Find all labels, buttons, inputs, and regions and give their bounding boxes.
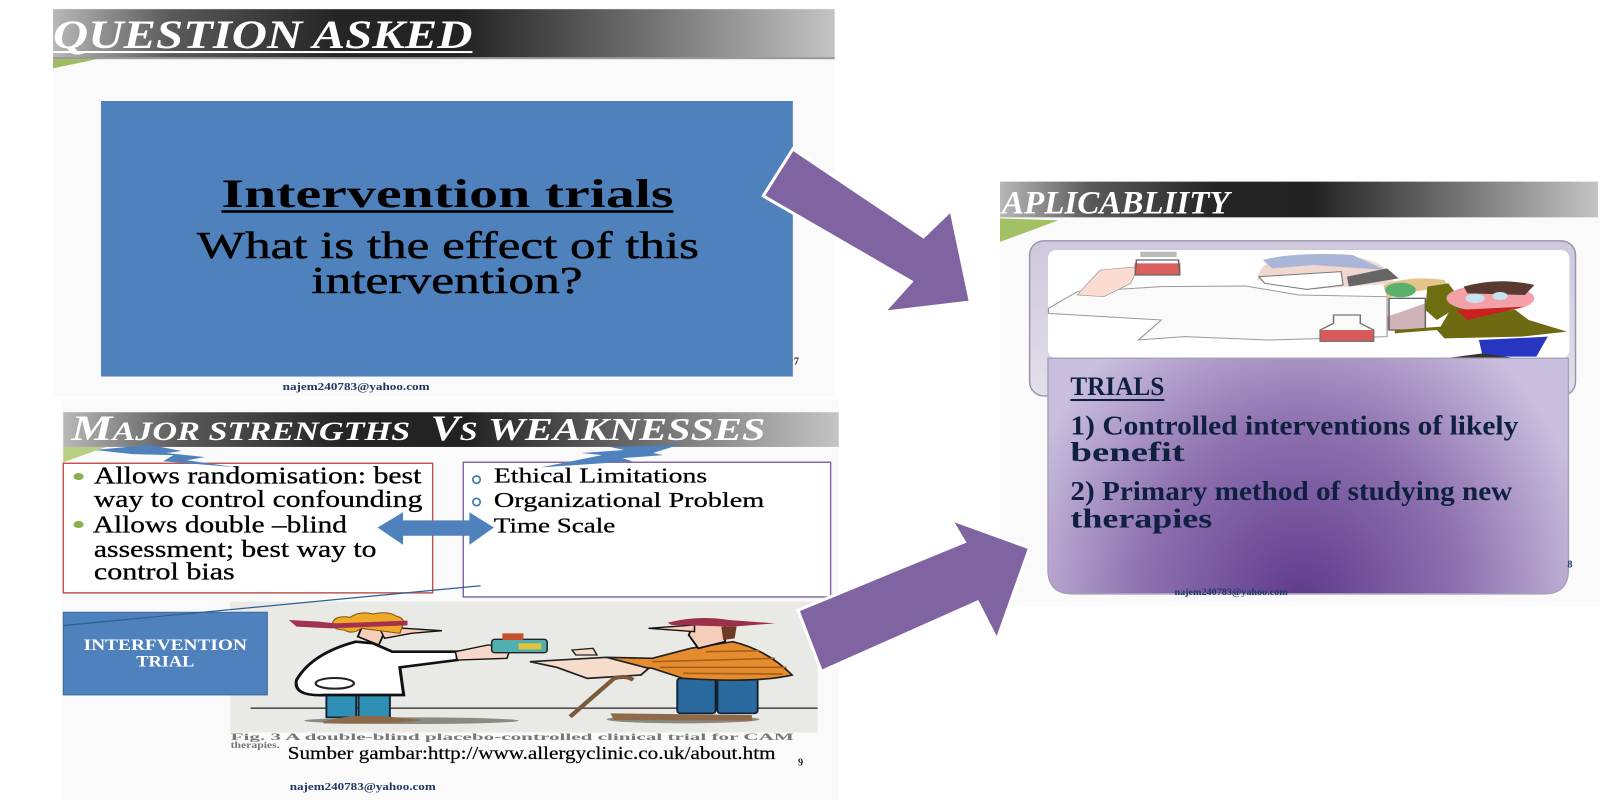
strengths box: way to control confounding xyxy=(94,486,422,513)
image source: Sumber gambar:http://www.allergyclinic.co.uk/about.htm xyxy=(288,743,776,763)
trials text panel: 2) Primary method of studying new xyxy=(1070,475,1512,506)
weaknesses box xyxy=(463,462,831,597)
question box: Intervention trials xyxy=(221,172,673,216)
page number 8: 8 xyxy=(1567,559,1572,570)
cartoon: double-blind trial xyxy=(230,602,818,732)
cartoon: scientists in the lab xyxy=(1048,252,1567,358)
weaknesses box: Ethical Limitations xyxy=(494,464,707,488)
figure caption: Fig. 3 A double-blind placebo-controlled clinical trial for CAM xyxy=(231,732,795,742)
arrow: question to applicability xyxy=(763,149,970,312)
picture frame xyxy=(1030,241,1576,396)
strengths box: Allows randomisation: best xyxy=(94,463,422,490)
question box: intervention? xyxy=(311,260,583,302)
flask in hand xyxy=(1135,252,1180,275)
connector line xyxy=(63,586,481,626)
header bar: applicability: APLICABLIITY xyxy=(1000,185,1233,221)
email: najem240783@yahoo.com xyxy=(1174,587,1288,597)
question box xyxy=(101,101,793,377)
weaknesses box: Time Scale xyxy=(494,514,615,538)
trials text panel xyxy=(1048,358,1568,594)
page number 9: 9 xyxy=(798,757,803,768)
email: najem240783@yahoo.com xyxy=(283,382,430,393)
intervention trial box: INTERFVENTION xyxy=(84,637,247,654)
page number 7: 7 xyxy=(794,356,799,367)
trials text panel: TRIALS xyxy=(1070,371,1164,401)
trials text panel: 1) Controlled interventions of likely xyxy=(1070,410,1519,441)
email: najem240783@yahoo.com xyxy=(290,782,436,793)
patient figure xyxy=(530,618,792,721)
figure caption xyxy=(231,732,795,750)
scientist figure xyxy=(1048,254,1399,340)
double arrow xyxy=(378,512,494,545)
header bar: strengths vs weaknesses: M AJOR STRENGTHS xyxy=(70,408,410,448)
arrow: strengths to applicability xyxy=(798,519,1030,671)
header bar: question asked: QUESTION ASKED xyxy=(53,13,472,57)
intervention trial box xyxy=(63,612,267,695)
panel: strengths vs weaknesses xyxy=(61,400,839,800)
panel: question asked xyxy=(53,8,835,396)
header bar: strengths vs weaknesses: VS xyxy=(431,408,478,448)
flask on table xyxy=(1320,315,1374,341)
bottle xyxy=(492,633,547,653)
lightning callout left xyxy=(95,445,237,467)
strengths box: assessment; best way to xyxy=(94,536,377,563)
weaknesses box: Organizational Problem xyxy=(494,488,765,512)
strengths box: Allows double –blind xyxy=(93,512,347,539)
doctor figure xyxy=(289,613,511,724)
lightning callout right xyxy=(541,445,679,467)
strengths box xyxy=(63,463,433,593)
trials text panel: therapies xyxy=(1070,503,1213,534)
figure caption: therapies. xyxy=(231,740,280,750)
panel: applicability xyxy=(1000,182,1600,606)
little man figure xyxy=(1383,278,1567,358)
strengths box: control bias xyxy=(94,559,235,586)
trials text panel: benefit xyxy=(1070,436,1186,467)
floor xyxy=(251,707,818,724)
header bar: question asked xyxy=(53,9,835,68)
header bar: strengths vs weaknesses: WEAKNESSES xyxy=(488,412,765,447)
intervention trial box: TRIAL xyxy=(136,653,194,670)
question box: What is the effect of this xyxy=(197,225,699,267)
header bar: applicability xyxy=(1000,182,1598,242)
header bar: strengths vs weaknesses xyxy=(63,408,839,462)
